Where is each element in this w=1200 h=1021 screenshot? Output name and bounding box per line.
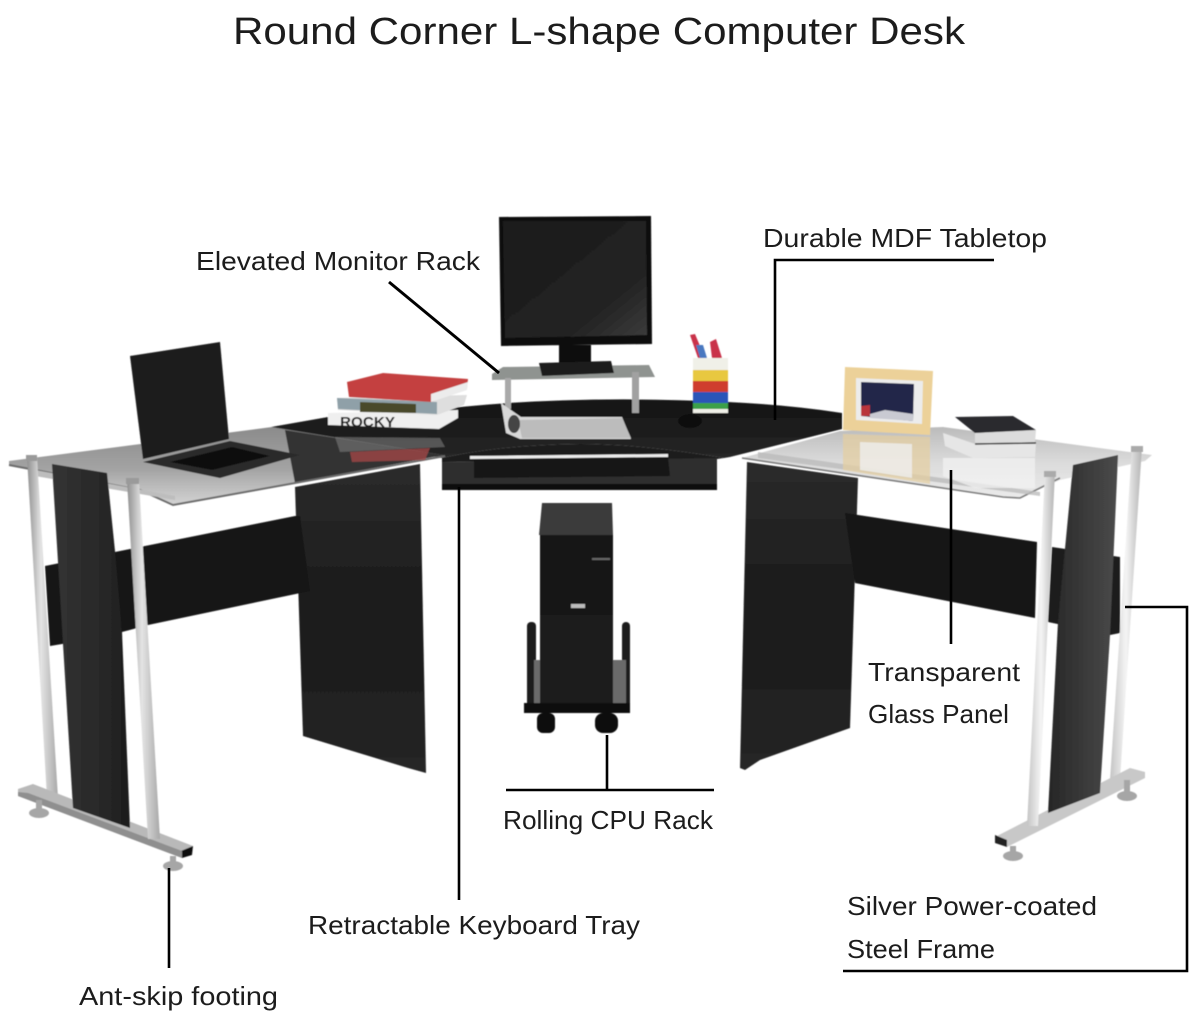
- label: transparent glass panel: Glass Panel: [868, 699, 1009, 729]
- frame picture: [861, 382, 914, 421]
- rack arms: [527, 622, 536, 707]
- laptop base: [143, 441, 300, 478]
- keyboard: [474, 458, 670, 478]
- mouse: [678, 414, 702, 428]
- keyboard tray: [442, 454, 717, 490]
- tower side top: [539, 503, 613, 535]
- middle book: [337, 395, 467, 415]
- glass over dark panel: [285, 430, 443, 483]
- magazine: [501, 403, 631, 439]
- label: transparent glass panel: [868, 657, 1021, 729]
- right board: [1048, 455, 1118, 813]
- left foot bar shade: [18, 792, 182, 858]
- desk illustration: [9, 216, 1152, 871]
- pens: [690, 334, 705, 358]
- leader: steel frame: [843, 607, 1187, 971]
- leader: footing: [168, 868, 170, 968]
- right back silver pole: [1110, 447, 1142, 780]
- laptop screen: [130, 342, 229, 459]
- title: Round Corner L-shape Computer Desk: [233, 11, 966, 53]
- rack base: [524, 703, 630, 713]
- left glass panel: [9, 427, 443, 505]
- under-desk shadow: [442, 444, 724, 462]
- tower front: [540, 535, 613, 703]
- right foot bar: [995, 768, 1145, 847]
- left books: [328, 373, 468, 431]
- bottom book: [328, 410, 458, 429]
- book reflection on desk: [335, 437, 445, 462]
- label: transparent glass panel: Transparent: [868, 657, 1021, 687]
- leader: glass panel: [950, 470, 952, 644]
- left glass edge: [9, 456, 445, 505]
- left wing stretcher: [45, 516, 310, 646]
- top book: [347, 373, 468, 402]
- right glass edge: [742, 458, 1060, 498]
- CPU tower on rolling rack: [524, 503, 630, 733]
- right books: [943, 416, 1036, 458]
- label: retractable keyboard tray: Retractable Keyboard Tray: [308, 910, 640, 940]
- label: rolling CPU rack: Rolling CPU Rack: [503, 805, 714, 835]
- left back silver pole: [27, 457, 58, 798]
- book reflection on glass: [943, 458, 1035, 488]
- right wing stretcher: [845, 513, 1037, 618]
- leader: durable tabletop: [775, 260, 994, 420]
- photo frame: [843, 367, 933, 435]
- monitor: [499, 216, 652, 376]
- right glass panel: [742, 427, 1152, 498]
- right glass rail: [758, 452, 1040, 496]
- left front board: [52, 464, 130, 828]
- left pole caps: [26, 455, 139, 484]
- label: steel frame: [847, 891, 1097, 964]
- left front silver pole: [127, 480, 160, 839]
- pen cup: [690, 334, 728, 413]
- laptop: [130, 342, 300, 478]
- laptop keys: [170, 447, 270, 470]
- right wing inner panel: [740, 462, 858, 770]
- right pole caps: [1044, 446, 1143, 477]
- leader: keyboard tray: [458, 487, 460, 900]
- label: elevated monitor rack: Elevated Monitor Rack: [196, 246, 481, 276]
- left wing rear panel: [295, 464, 426, 773]
- left foot bar end: [181, 846, 193, 858]
- wheels: [537, 713, 555, 733]
- label: durable tabletop: Durable MDF Tabletop: [763, 223, 1047, 253]
- leader: rolling CPU rack: [506, 735, 714, 790]
- label: steel frame: Silver Power-coated: [847, 891, 1097, 921]
- monitor rack: [492, 365, 655, 413]
- leader: elevated monitor rack: [389, 282, 499, 373]
- right feet: [1003, 780, 1137, 861]
- frame reflection: [843, 434, 930, 484]
- right wing stretcher end: [1048, 547, 1120, 635]
- rocky label: ROCKY: [340, 414, 395, 431]
- left foot bar: [18, 784, 193, 858]
- frame reflection mat: [860, 442, 912, 478]
- left wing rail: [35, 470, 175, 500]
- label: anti-skip footing: Ant-skip footing: [79, 981, 278, 1011]
- label: steel frame: Steel Frame: [847, 934, 995, 964]
- right front silver pole: [1027, 472, 1055, 826]
- cup: [693, 358, 728, 413]
- central black desktop: [271, 399, 842, 458]
- right foot bar end: [995, 835, 1007, 847]
- left feet: [29, 800, 183, 871]
